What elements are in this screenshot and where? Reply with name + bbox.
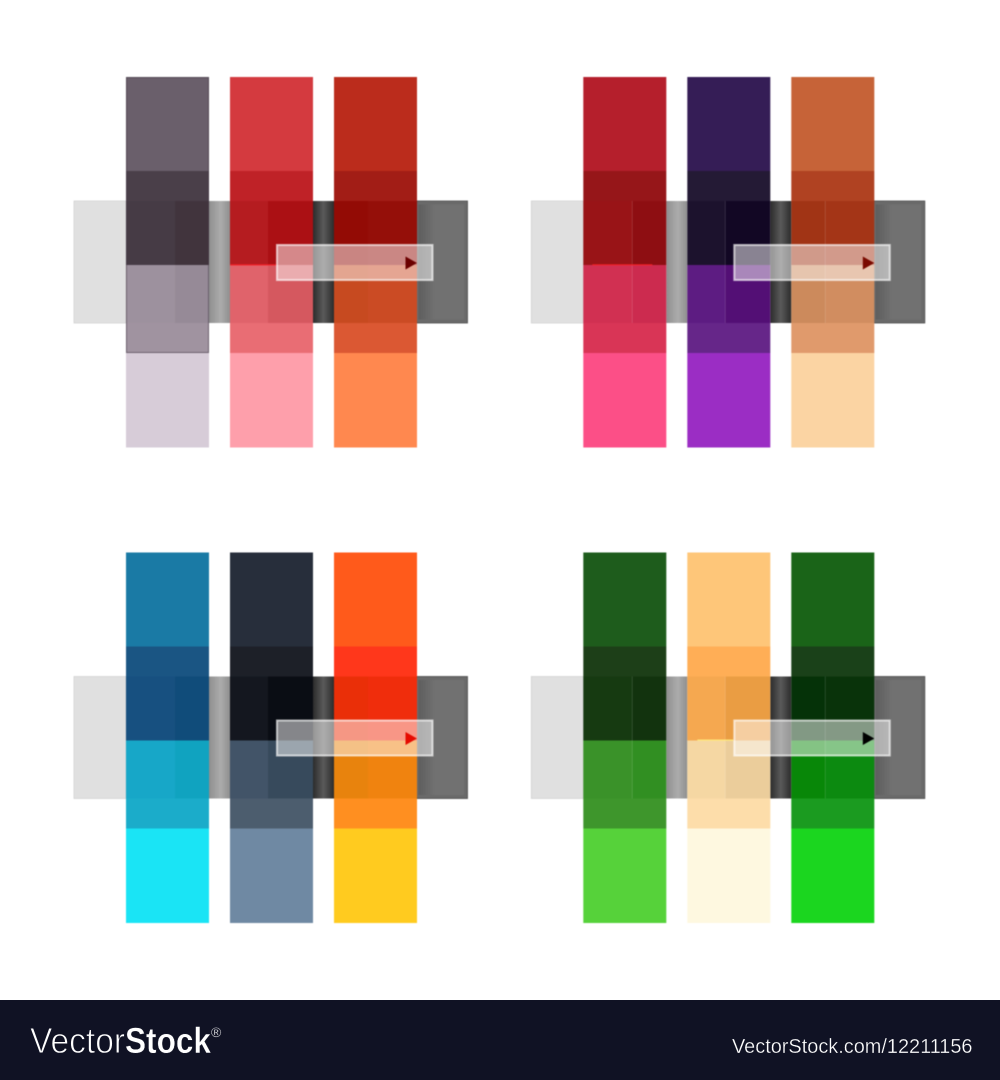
panel: green, cream and bright green bars <box>531 552 925 923</box>
column 3 <box>334 552 417 923</box>
column 1 <box>126 77 209 448</box>
footer bar <box>0 1000 1000 1080</box>
panel: grey, red and dark red bars <box>74 77 468 448</box>
arrow label box <box>277 720 432 756</box>
column 3 <box>791 552 874 923</box>
logo: VectorStock: Vector <box>30 1020 125 1061</box>
horizontal grey band <box>531 201 925 323</box>
arrow label box <box>277 245 432 280</box>
logo: VectorStock <box>30 1020 222 1061</box>
horizontal grey band <box>531 676 925 798</box>
icon: arrow <box>863 732 874 745</box>
logo: VectorStock: ® <box>211 1024 222 1040</box>
logo: VectorStock: Stock <box>125 1020 212 1061</box>
arrow label box <box>734 720 890 756</box>
column 3 <box>334 77 417 448</box>
arrow label box <box>734 245 890 280</box>
column 1 <box>583 552 666 923</box>
column 2 <box>687 77 770 448</box>
horizontal grey band <box>74 676 468 798</box>
column 2 <box>230 552 313 923</box>
horizontal grey band <box>74 201 468 323</box>
column 3 <box>791 77 874 448</box>
icon: arrow <box>863 256 874 270</box>
image id text: VectorStock.com/12211156 <box>732 1035 972 1058</box>
column 1 <box>126 552 209 923</box>
icon: arrow <box>406 256 417 270</box>
icon: arrow <box>406 732 417 745</box>
column 1 <box>583 77 666 448</box>
column 2 <box>230 77 313 448</box>
column 2 <box>687 552 770 923</box>
panel: crimson, purple and orange bars <box>531 77 925 448</box>
panel: blue, navy and orange bars <box>74 552 468 923</box>
